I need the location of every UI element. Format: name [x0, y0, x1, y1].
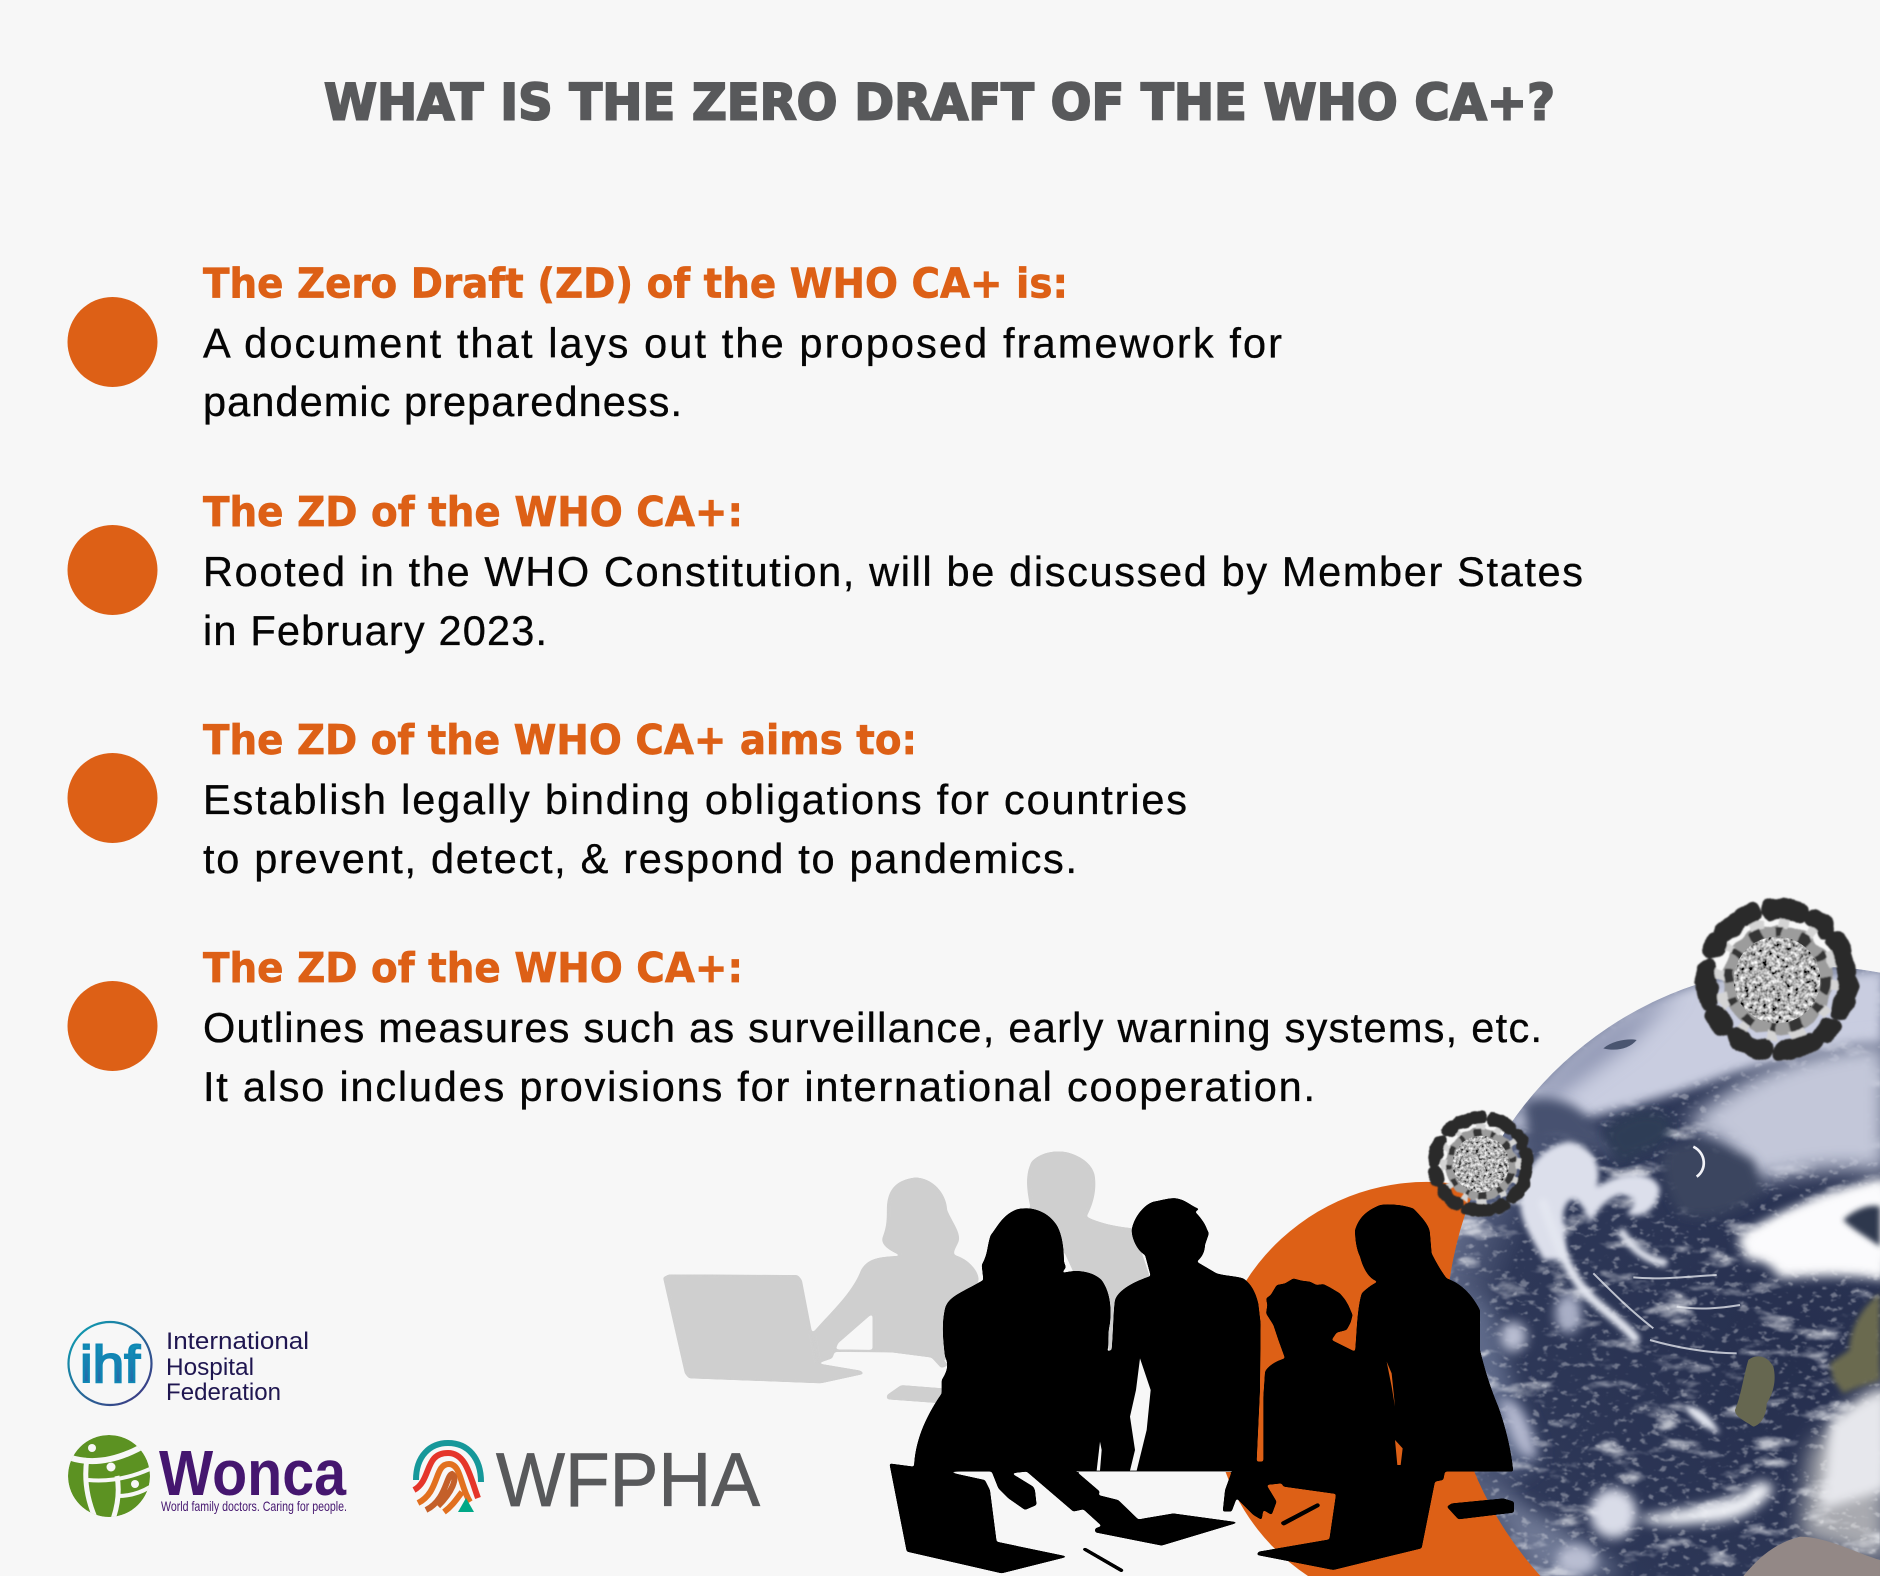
virus: large [1706, 909, 1848, 1051]
earth globe [1450, 967, 1880, 1576]
IHF ring [68, 1322, 152, 1405]
body 3: to prevent, detect, & respond to pandemics. [203, 835, 1077, 882]
heading 1: The Zero Draft (ZD) of the WHO CA+ is: [203, 260, 1068, 308]
WFPHA fingerprint icon [414, 1443, 481, 1512]
body 3: Establish legally binding obligations for countries [203, 776, 1187, 823]
Wonca tagline: World family doctors. Caring for people. [161, 1498, 347, 1514]
body 2: in February 2023. [203, 607, 547, 654]
bullet 1 [68, 297, 158, 387]
black group of people [889, 1198, 1513, 1573]
WFPHA wordmark: WFPHA [496, 1438, 760, 1523]
grey background woman and laptop [663, 1177, 979, 1403]
IHF monogram: ihf [80, 1336, 141, 1394]
heading 3: The ZD of the WHO CA+ aims to: [203, 716, 917, 764]
virus: small [1421, 1105, 1540, 1224]
body 2 [203, 548, 1583, 654]
pen left [1082, 1547, 1124, 1573]
bullet 2 [68, 525, 158, 615]
body 1 [203, 320, 1282, 425]
logo: International Hospital Federation [68, 1322, 309, 1406]
pen right [1280, 1503, 1321, 1526]
bullet 3 [68, 753, 158, 843]
orange slivers between figures [1387, 1362, 1403, 1465]
item 3: aims [68, 716, 1187, 882]
IHF wordmark: Hospital [166, 1354, 254, 1381]
item 1: what the zero draft is [68, 260, 1282, 425]
body 3 [203, 776, 1187, 882]
phone [1447, 1498, 1514, 1519]
body 4: It also includes provisions for international cooperation. [203, 1063, 1315, 1110]
logo: Wonca [68, 1435, 347, 1522]
Wonca globe [68, 1435, 152, 1522]
heading 2: The ZD of the WHO CA+: [203, 488, 743, 536]
IHF wordmark: International [166, 1328, 309, 1355]
orange circle behind people [1212, 1182, 1642, 1576]
logo: WFPHA [414, 1438, 760, 1523]
IHF wordmark: Federation [166, 1379, 281, 1406]
item 2: constitution and discussion [68, 488, 1583, 654]
cloud systems, upper hemisphere [1507, 970, 1880, 1260]
bullet 4 [68, 981, 158, 1071]
body 2: Rooted in the WHO Constitution, will be discussed by Member States [203, 548, 1583, 595]
southern and eastern surface tones [1450, 1290, 1880, 1576]
title: WHAT IS THE ZERO DRAFT OF THE WHO CA+? [324, 74, 1555, 132]
body 4: Outlines measures such as surveillance, early warning systems, etc. [203, 1004, 1542, 1051]
table edge [1077, 1471, 1232, 1472]
grey background people [663, 1151, 1151, 1403]
heading 4: The ZD of the WHO CA+: [203, 944, 743, 992]
grey background man [1019, 1151, 1151, 1353]
gap near second woman [1097, 1442, 1102, 1471]
body 4 [203, 1004, 1542, 1110]
item 4: measures [68, 944, 1542, 1110]
cloud systems and land, lower hemisphere [1500, 1180, 1880, 1576]
black foreground people and laptops [889, 1198, 1514, 1573]
gap under man's arm [1130, 1358, 1151, 1471]
body 1: pandemic preparedness. [203, 378, 682, 425]
IHF wordmark [166, 1328, 309, 1406]
Wonca wordmark: Wonca [159, 1437, 346, 1509]
body 1: A document that lays out the proposed framework for [203, 320, 1282, 366]
